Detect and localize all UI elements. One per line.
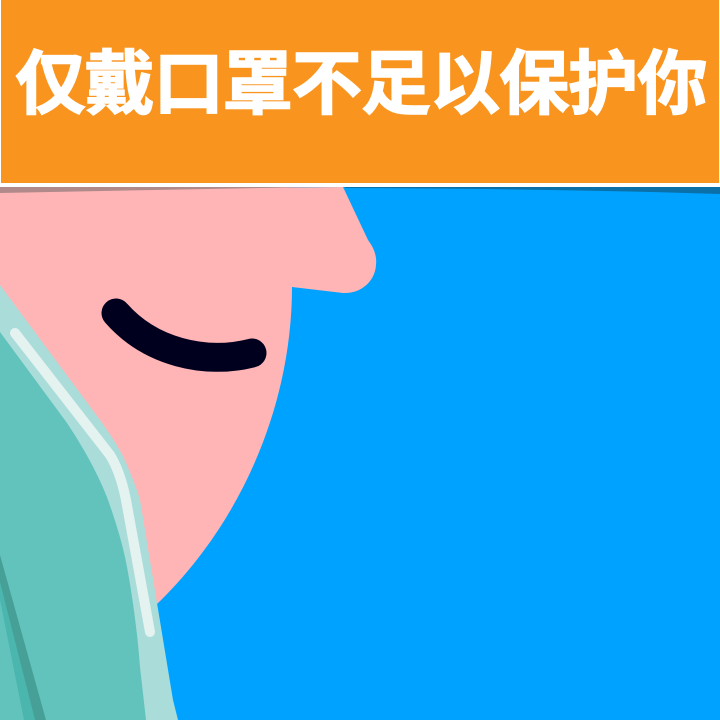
title banner [1,0,719,183]
shadow under banner [0,187,720,194]
face [0,187,376,640]
collar highlight [15,333,150,632]
jacket fold [0,555,46,720]
jacket collar [0,285,178,720]
mouth [116,313,252,357]
white strip behind banner [0,0,720,187]
title: 仅戴口罩不足以保护你 [16,45,706,123]
jacket body [0,332,146,720]
